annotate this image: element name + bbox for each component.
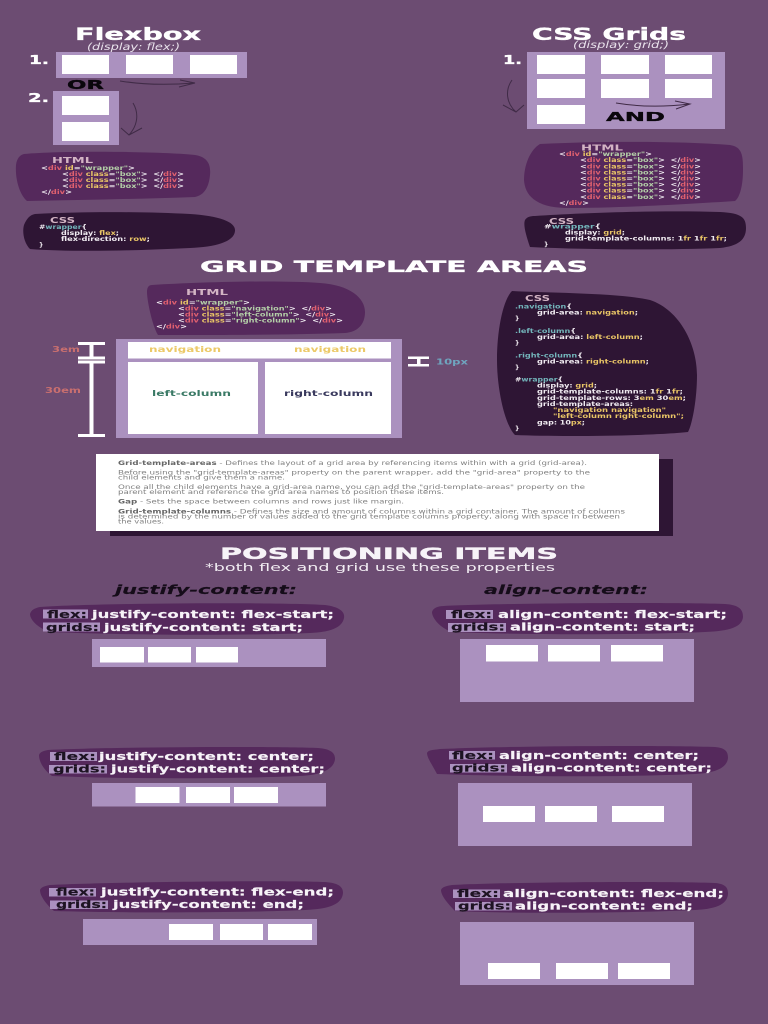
grid CSS code block: grid-template-columns: 1 fr 1 fr 1 fr ; — [565, 236, 727, 242]
align flex-end code: align-content: end; — [515, 900, 693, 912]
template areas HTML code block: < div class = "navigation" > </ div > — [178, 306, 332, 312]
justify flex-end code: grids: — [56, 899, 107, 911]
note: both flex and grid: *both flex and grid use these properties — [205, 561, 555, 574]
template areas CSS code block: grid-area: right-column ; — [537, 358, 649, 365]
number 1: 1. — [503, 53, 522, 67]
align flex-start code: grids: — [451, 622, 505, 634]
grid HTML code block: < div class = "box" > </ div > — [580, 194, 701, 201]
justify flex-end code: justify-content: end; — [111, 898, 304, 911]
arrow: grid column direction — [503, 80, 524, 112]
subheading: display grid: (display: grid;) — [573, 40, 669, 51]
template areas HTML code block: </ div > — [156, 324, 187, 330]
right-column cell: right-column — [284, 389, 373, 398]
subheading: display flex: (display: flex;) — [87, 42, 180, 53]
grid CSS code block — [524, 211, 746, 249]
flex CSS code block: #wrapper { — [39, 224, 87, 231]
flex CSS code block — [23, 212, 235, 251]
justify flex-start code: justify-content: start; — [103, 621, 303, 634]
justify flex-end code: flex: — [56, 886, 95, 898]
flex HTML code block: < div class = "box" > </ div > — [62, 171, 184, 178]
flex HTML code block — [16, 152, 210, 201]
heading: Flexbox: Flexbox — [75, 25, 201, 45]
template areas HTML code block: < div class = "right-column" > </ div > — [178, 318, 343, 324]
right-column cell — [265, 362, 391, 434]
template areas CSS code block: grid-template-areas: — [537, 401, 633, 408]
explanation panel — [96, 454, 673, 536]
template areas HTML code block: < div class = "left-column" > </ div > — [178, 312, 336, 318]
explanation panel: child elements and give them a name. — [118, 474, 285, 481]
justify center code: grids: — [53, 764, 106, 776]
justify flex-end code: justify-content: flex-end; — [99, 886, 334, 898]
column heading: align-content: align-content: — [484, 582, 648, 597]
label: 3em: 3em — [52, 345, 80, 354]
grid HTML code block: < div class = "box" > </ div > — [580, 170, 701, 176]
justify center code: flex: — [54, 751, 96, 763]
template areas CSS code block: "left-column right-column"; — [553, 413, 684, 420]
grid layout diagram — [116, 339, 402, 438]
left-column cell: left-column — [152, 389, 231, 398]
template areas CSS code block: grid-template-rows: 3 em 30 em ; — [537, 395, 686, 402]
template areas CSS code block: } — [515, 316, 519, 323]
template areas CSS code block — [497, 291, 697, 436]
align center code: flex: — [452, 750, 494, 762]
row height ruler — [78, 342, 105, 437]
number 2: 2. — [28, 91, 49, 105]
template areas CSS code block: gap: 10 px ; — [537, 419, 585, 426]
label: 30em: 30em — [45, 386, 81, 395]
grid HTML code block: < div class = "box" > </ div > — [580, 164, 701, 170]
panel: css grids — [503, 25, 746, 249]
heading: grid template areas: GRID TEMPLATE AREAS — [200, 257, 588, 276]
align flex-end code — [441, 882, 728, 913]
column heading: justify-content: justify-content: — [112, 582, 297, 597]
align center code: align-content: center; — [511, 762, 712, 774]
flex HTML code block: < div id = "wrapper" > — [41, 165, 135, 172]
flex HTML code block: < div class = "box" > </ div > — [62, 183, 184, 190]
template areas CSS code block: } — [515, 425, 519, 432]
navigation cell: navigation — [294, 345, 366, 354]
align center code: align-content: center; — [499, 749, 699, 762]
template areas HTML code block — [147, 282, 365, 335]
column container diagram — [53, 91, 119, 145]
grid HTML code block: HTML — [581, 144, 623, 152]
label: OR: OR — [67, 78, 104, 92]
justify flex-start diagram — [92, 639, 326, 667]
justify flex-start code — [30, 603, 344, 635]
justify flex-start code: justify-content: flex-start; — [90, 608, 334, 621]
template areas CSS code block: grid-template-columns: 1 fr 1 fr ; — [537, 389, 683, 396]
explanation panel: parent element and reference the grid area names to position these items. — [118, 489, 444, 496]
arrow: grid row direction — [616, 101, 690, 109]
grid CSS code block: CSS — [549, 217, 574, 226]
heading: CSS Grids: CSS Grids — [532, 25, 686, 45]
template areas CSS code block: .left-column { — [515, 328, 576, 335]
justify center code — [39, 747, 335, 778]
explanation panel: Gap - Sets the space between columns and rows just like margin. — [118, 499, 404, 506]
align center code — [427, 746, 728, 776]
justify flex-start code: flex: — [47, 609, 87, 621]
explanation panel: Grid-template-columns - Defines the size and amount of columns within a grid container. The amount of columns — [118, 508, 625, 515]
explanation panel: Grid-template-areas - Defines the layout of a grid area by referencing items within with a grid (grid-area). — [118, 460, 587, 467]
grid HTML code block: < div class = "box" > </ div > — [580, 182, 701, 188]
template areas CSS code block: } — [515, 364, 519, 371]
template areas CSS code block: } — [515, 340, 519, 347]
template areas CSS code block: "navigation navigation" — [553, 407, 666, 414]
number 1: 1. — [29, 53, 49, 67]
left-column cell — [128, 362, 258, 434]
align center code: grids: — [452, 762, 506, 774]
flex CSS code block: display: flex ; — [61, 230, 119, 237]
template areas CSS code block: .navigation { — [515, 304, 572, 311]
arrow: row direction — [120, 80, 195, 87]
flex CSS code block: } — [39, 242, 43, 249]
panel: grid template areas — [45, 257, 697, 536]
template areas CSS code block: CSS — [525, 294, 550, 303]
align flex-start code: align-content: start; — [510, 620, 695, 634]
align flex-end diagram — [460, 922, 694, 985]
gap ruler — [408, 356, 429, 366]
grid CSS code block: display: grid ; — [565, 230, 625, 236]
template areas HTML code block: HTML — [186, 288, 228, 297]
explanation panel: Before using the "grid-template-areas" property on the parent wrapper, add the "grid-area" property to the — [118, 469, 590, 476]
align flex-end code: grids: — [458, 900, 511, 912]
grid HTML code block: < div class = "box" > </ div > — [580, 157, 701, 164]
align center diagram — [458, 783, 692, 846]
justify center code: justify-content: center; — [98, 750, 314, 763]
grid CSS code block: # wrapper { — [544, 224, 601, 230]
flex CSS code block: CSS — [50, 216, 75, 225]
justify flex-end diagram — [83, 919, 317, 945]
template areas HTML code block: < div id = "wrapper" > — [156, 300, 250, 306]
row container diagram — [56, 52, 247, 78]
panel: positioning items — [30, 544, 743, 985]
template areas CSS code block: .right-column { — [515, 352, 583, 359]
template areas CSS code block: display: grid ; — [537, 383, 597, 390]
template areas CSS code block: #wrapper { — [515, 376, 563, 383]
grid HTML code block: < div id = "wrapper" > — [559, 151, 652, 158]
explanation panel: is determined by the number of values added to the grid template columns property, along with space in between — [118, 513, 620, 520]
justify center code: justify-content: center; — [110, 762, 325, 776]
align flex-start code — [432, 603, 743, 634]
heading: positioning items: POSITIONING ITEMS — [220, 544, 558, 563]
align flex-end code: flex: — [457, 888, 499, 900]
arrow: column direction — [121, 103, 142, 135]
label: AND: AND — [606, 110, 665, 124]
justify flex-start code: grids: — [46, 622, 99, 634]
label: 10px: 10px — [436, 358, 469, 366]
navigation cell — [128, 342, 391, 358]
navigation cell: navigation — [149, 345, 221, 354]
panel: flexbox — [16, 25, 247, 251]
explanation panel: Once all the child elements have a grid-area name, you can add the "grid-template-areas" property on the — [118, 484, 585, 491]
grid HTML code block: </ div > — [559, 200, 589, 207]
explanation panel: the values. — [118, 518, 164, 525]
align flex-start code: flex: — [451, 609, 492, 621]
template areas CSS code block: grid-area: left-column ; — [537, 334, 643, 341]
align flex-start diagram — [460, 639, 694, 702]
grid HTML code block: < div class = "box" > </ div > — [580, 188, 701, 194]
justify flex-end code — [40, 881, 343, 912]
align flex-start code: align-content: flex-start; — [498, 608, 727, 621]
flex HTML code block: < div class = "box" > </ div > — [62, 177, 184, 184]
grid HTML code block: < div class = "box" > </ div > — [580, 176, 701, 182]
flex CSS code block: flex-direction: row ; — [61, 236, 150, 243]
template areas CSS code block: grid-area: navigation ; — [537, 310, 638, 317]
grid HTML code block — [524, 142, 743, 208]
grid container diagram — [527, 52, 725, 129]
flex HTML code block: </ div > — [41, 189, 72, 196]
align flex-end code: align-content: flex-end; — [503, 887, 724, 900]
flex HTML code block: HTML — [52, 156, 93, 165]
grid CSS code block: } — [544, 242, 548, 248]
justify center diagram — [92, 783, 326, 806]
